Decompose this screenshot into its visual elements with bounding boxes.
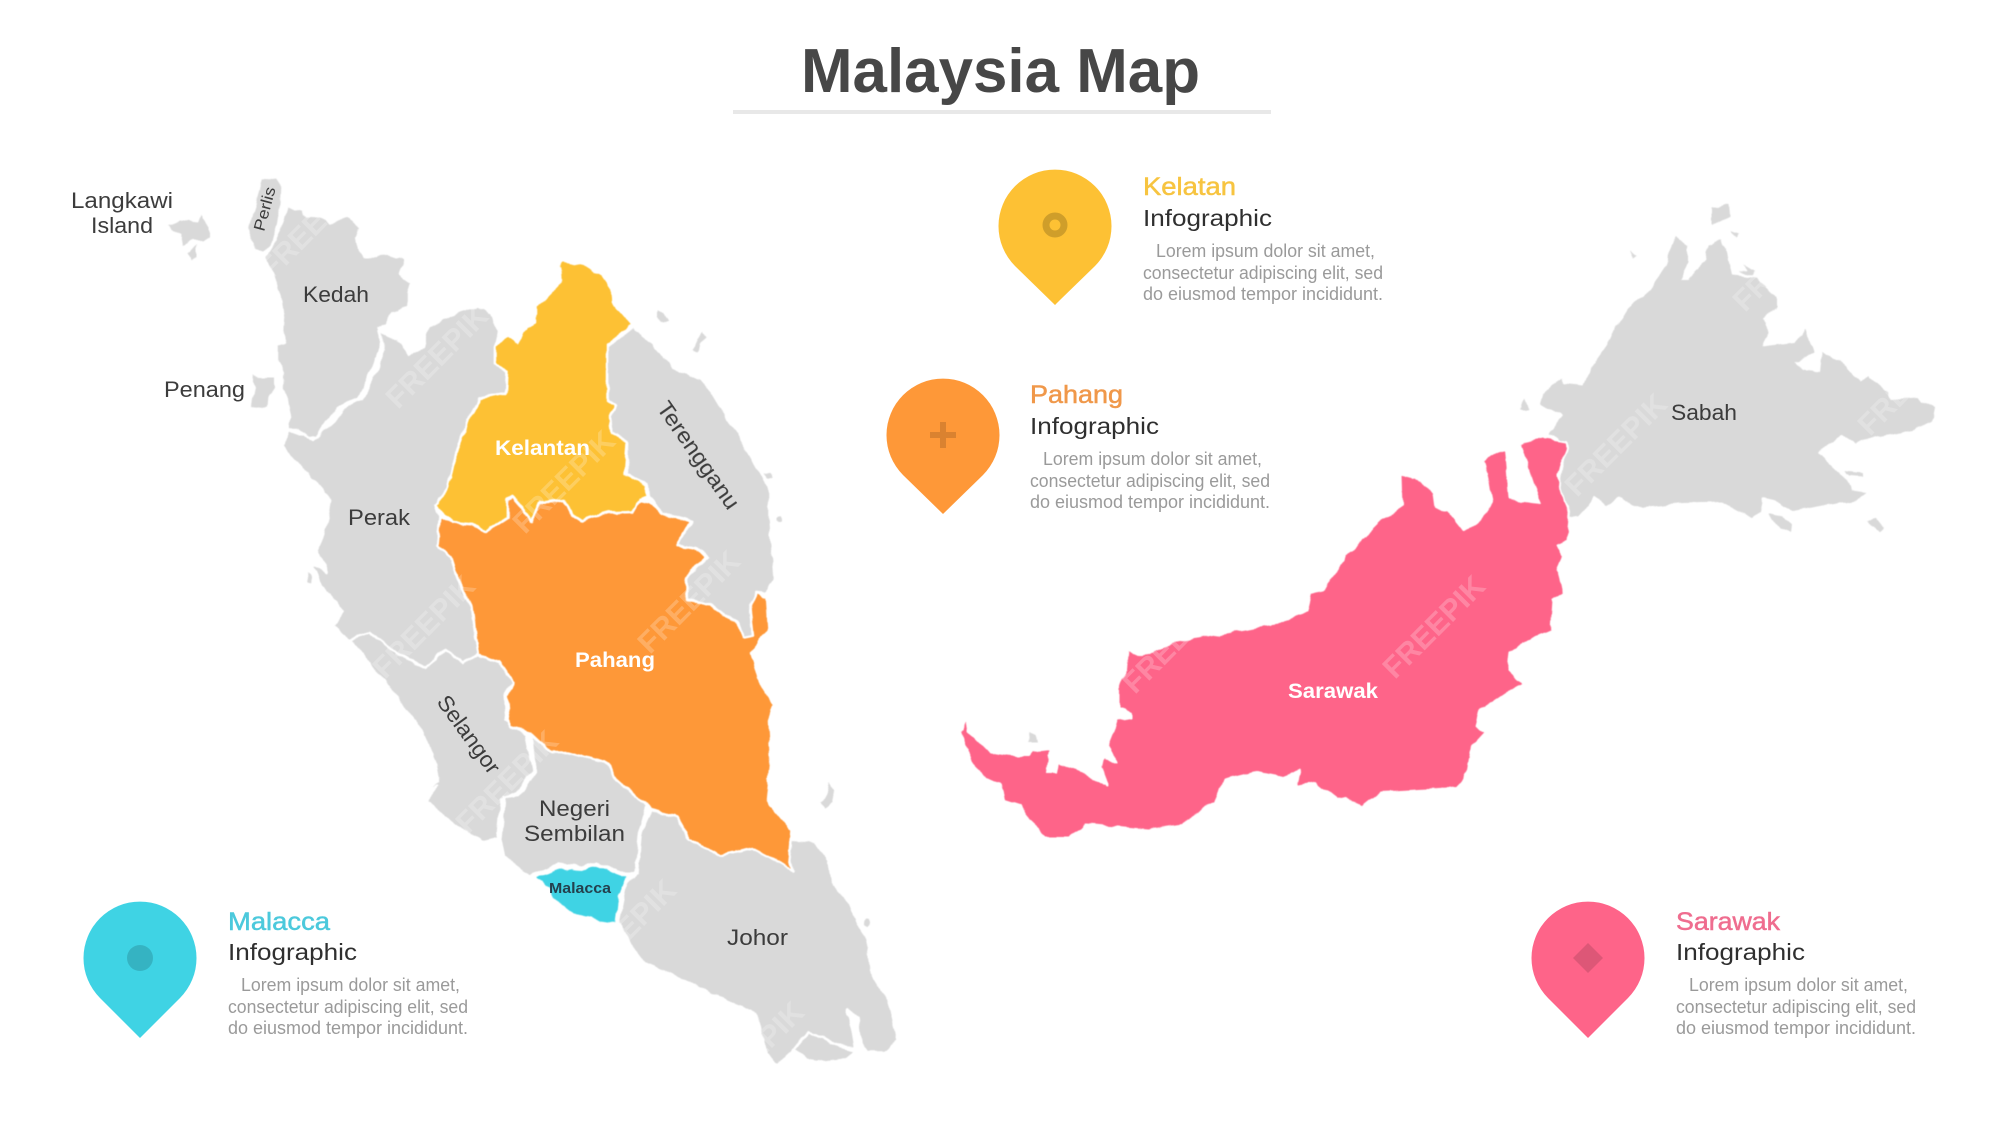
region: Kelantan (highlighted) (435, 260, 649, 532)
label: Langkawi Island: Langkawi (71, 188, 173, 213)
region: Negeri Sembilan (501, 735, 649, 877)
label: Pahang: Pahang (575, 649, 655, 672)
map: Peninsular Malaysia (168, 177, 899, 1065)
region: Pahang (highlighted) (437, 497, 794, 870)
watermarks: FREEPIK (1852, 326, 1967, 442)
map: East Malaysia (960, 203, 1935, 837)
label: Kedah: Kedah (303, 282, 369, 307)
label: Terengganu: Terengganu (652, 397, 745, 514)
text: Kelatan: Infographic (1143, 205, 1272, 231)
watermarks: FREEPIK (632, 544, 747, 660)
text: Malacca: Malacca (228, 908, 330, 936)
text: Pahang: Infographic (1030, 413, 1159, 439)
watermarks: FREEPIK (367, 569, 482, 685)
text: Malacca: Infographic (228, 939, 357, 965)
islands: east coast (307, 311, 870, 926)
watermarks (254, 169, 1967, 1111)
text: Sarawak: Lorem ipsum dolor sit amet, (1689, 975, 1908, 995)
region: Terengganu (607, 327, 775, 638)
region: Langkawi Island (168, 215, 210, 260)
text: Pahang: do eiusmod tempor incididunt. (1030, 492, 1270, 512)
region: Perak (283, 305, 507, 668)
text: Pahang (1030, 381, 1270, 512)
icon: cyan pin (84, 902, 197, 1038)
callout: Pahang (887, 379, 1270, 514)
islands: Sabah (1028, 203, 1884, 742)
label: Perak: Perak (348, 505, 411, 530)
watermarks: FREEPIK (568, 873, 683, 989)
label: Kelantan: Kelantan (495, 437, 590, 460)
label: Langkawi Island: Island (91, 213, 153, 238)
watermarks: FREEPIK (1727, 202, 1842, 318)
region: Sabah (1540, 237, 1935, 518)
region: Selangor (350, 633, 533, 842)
callout: Malacca (84, 902, 468, 1038)
text: Malacca (228, 908, 468, 1038)
watermarks: FREEPIK (450, 724, 565, 840)
region: Kedah (263, 207, 411, 437)
text: Kelatan: consectetur adipiscing elit, sed (1143, 263, 1383, 283)
text: Pahang: Lorem ipsum dolor sit amet, (1043, 449, 1262, 469)
watermarks: FREEPIK (507, 424, 622, 540)
callout: Kelatan (998, 170, 1383, 305)
watermarks: FREEPIK (1377, 569, 1492, 685)
text: Sarawak: Infographic (1676, 939, 1805, 965)
watermarks: FREEPIK (380, 299, 495, 415)
icon: orange pin (887, 379, 1000, 514)
label: Perlis: Perlis (251, 185, 280, 233)
label: Selangor: Selangor (432, 690, 506, 779)
text: Sarawak: consectetur adipiscing elit, sed (1676, 997, 1916, 1017)
text: Kelatan (1143, 173, 1383, 304)
text: Pahang: Pahang (1030, 381, 1123, 409)
watermarks: FREEPIK (254, 169, 369, 285)
watermarks: FREEPIK (1559, 387, 1674, 503)
text: Sarawak (1676, 908, 1916, 1038)
region: Penang (252, 376, 275, 408)
text: Malacca: Lorem ipsum dolor sit amet, (241, 975, 460, 995)
icon: yellow pin (998, 170, 1111, 305)
callout: Sarawak (1532, 902, 1916, 1038)
region: Malacca (highlighted) (535, 865, 628, 924)
text: Malacca: consectetur adipiscing elit, sed (228, 997, 468, 1017)
region: southern Johor lobe (794, 1032, 855, 1063)
label: Negeri Sembilan: Negeri (539, 796, 610, 821)
text: Pahang: consectetur adipiscing elit, sed (1030, 471, 1270, 491)
title: Malaysia Map (801, 37, 1200, 106)
watermarks: FREEPIK (1117, 584, 1232, 700)
text: Kelatan: Kelatan (1143, 173, 1236, 201)
region: Sarawak (highlighted) (960, 438, 1570, 837)
region: Johor (618, 810, 899, 1065)
label: Negeri Sembilan: Sembilan (524, 821, 625, 846)
text: Kelatan: do eiusmod tempor incididunt. (1143, 284, 1383, 304)
label: Negeri Sembilan (524, 796, 625, 846)
label: Sarawak: Sarawak (1288, 680, 1378, 703)
label: Johor: Johor (727, 925, 788, 950)
label: Penang: Penang (164, 377, 245, 402)
text: Kelatan: Lorem ipsum dolor sit amet, (1156, 241, 1375, 261)
text: Malacca: do eiusmod tempor incididunt. (228, 1018, 468, 1038)
icon: pink pin (1532, 902, 1644, 1038)
text: Sarawak: Sarawak (1676, 908, 1781, 936)
label: Langkawi Island (71, 188, 173, 238)
watermarks: FREEPIK (696, 995, 811, 1111)
label: Sabah: Sabah (1671, 400, 1737, 425)
map labels (71, 185, 1737, 950)
region: Perlis (248, 177, 283, 253)
text: Sarawak: do eiusmod tempor incididunt. (1676, 1018, 1916, 1038)
label: Malacca: Malacca (549, 881, 612, 897)
